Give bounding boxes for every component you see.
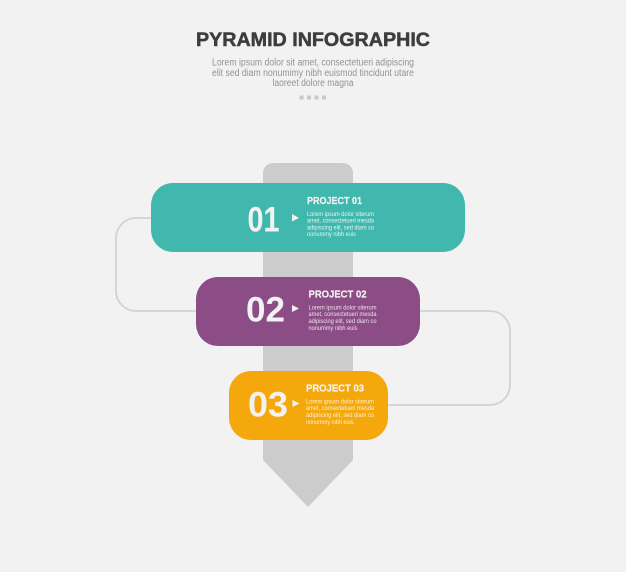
body text 03: adipiscing elit, sed diam co	[306, 412, 374, 419]
panel: project 02	[196, 277, 420, 346]
icon: arrow 02	[292, 305, 299, 312]
subtitle text: elit sed diam nonumimy nibh euismod tincidunt utare	[212, 68, 414, 79]
body text 01: Lorem ipsum dolor siterum	[307, 211, 374, 218]
subtitle text: laoreet dolore magna	[272, 78, 354, 89]
body text 01: nonummy nibh euis	[307, 231, 356, 238]
right connector line	[387, 311, 510, 405]
body text 02	[308, 304, 377, 332]
heading 03: PROJECT 03	[306, 384, 364, 394]
body text 02: amet, consectetueri mesda	[308, 311, 377, 318]
panel: project 01	[151, 183, 465, 252]
number 02: 02	[246, 291, 285, 330]
left connector line	[116, 218, 197, 311]
title: PYRAMID INFOGRAPHIC	[196, 29, 430, 51]
heading 01: PROJECT 01	[307, 196, 362, 207]
body text 01	[307, 211, 374, 238]
subtitle text: Lorem ipsum dolor sit amet, consectetueri adipiscing	[212, 58, 414, 68]
icon: arrow 03	[292, 400, 300, 407]
heading 02: PROJECT 02	[308, 290, 367, 300]
body text 03: nonummy nibh euis.	[306, 419, 355, 426]
panel: project 03	[229, 371, 388, 440]
body text 03: amet, consectetueri mesda	[306, 405, 374, 412]
body text 02: Lorem ipsum dolor siterum	[308, 304, 377, 312]
body text 01: adipiscing elit, sed diam co	[307, 224, 374, 232]
subtitle text	[212, 58, 414, 89]
central gray arrow	[263, 163, 353, 507]
body text 03: Lorem ipsum dolor siterum	[306, 398, 374, 406]
number 01: 01	[248, 200, 280, 240]
title dots	[300, 96, 326, 100]
body text 01: amet, consectetueri mesda	[307, 218, 374, 224]
icon: arrow 01	[292, 214, 299, 222]
body text 02: nonummy nibh euis	[308, 325, 358, 332]
body text 03	[306, 398, 374, 426]
body text 02: adipiscing elit, sed diam co	[308, 318, 377, 325]
number 03: 03	[248, 386, 288, 424]
